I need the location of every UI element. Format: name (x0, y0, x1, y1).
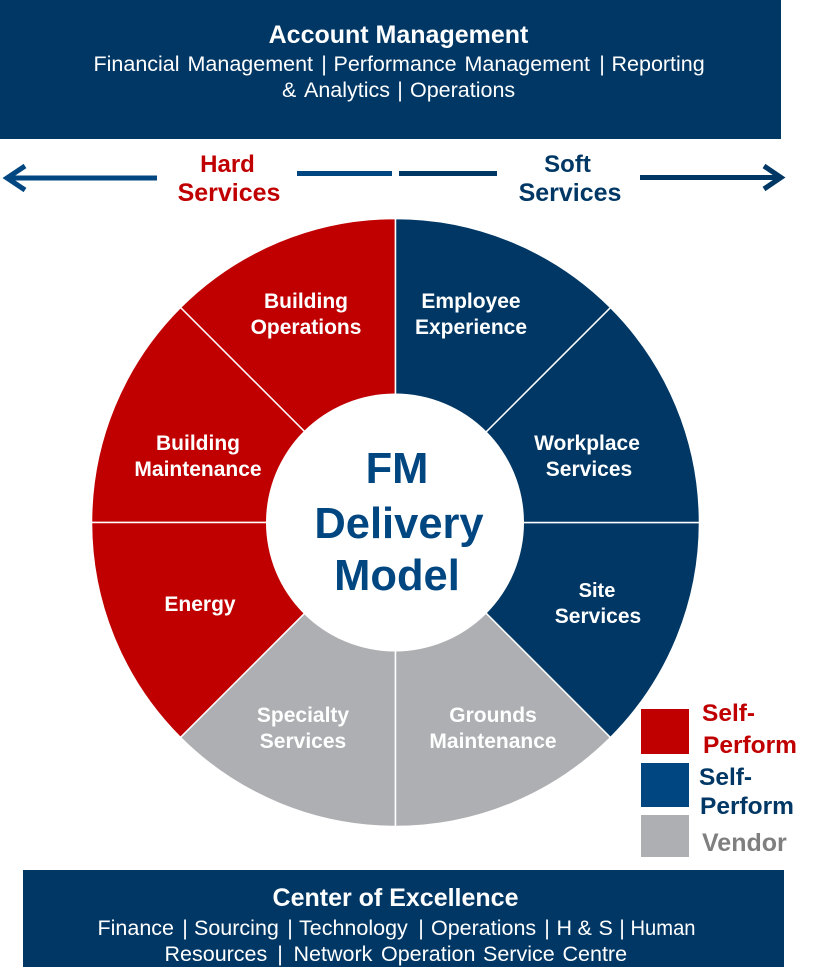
heading: center of excellence: Center of Excellence (273, 884, 519, 912)
heading: FM delivery model (314, 445, 484, 600)
text: account management items: Operations (410, 78, 515, 102)
arrow: hard services left (7, 166, 157, 190)
segment: building operations (180, 218, 396, 522)
label: building operations: Operations (251, 316, 361, 339)
heading: FM delivery model: FM (366, 445, 428, 493)
heading: soft services (519, 151, 621, 207)
text: center of excellence items: | (544, 916, 550, 940)
text: account management items: Performance (334, 52, 457, 76)
text: center of excellence items: | (277, 942, 283, 966)
text: center of excellence items: | (619, 916, 625, 940)
text: center of excellence items: S (598, 916, 613, 940)
text: center of excellence items: Finance (98, 916, 174, 940)
arrow: soft services right (640, 166, 781, 189)
text: center of excellence items: Operations (431, 916, 536, 940)
text: center of excellence items: Technology (299, 916, 408, 940)
segment: specialty services (180, 522, 396, 826)
label: building maintenance: Building (156, 432, 240, 455)
legend swatch: blue (641, 763, 689, 807)
label: workplace services: Services (546, 458, 632, 481)
text: center of excellence items: Human (630, 916, 696, 940)
text: account management items: Management (464, 52, 590, 76)
panel: account management (0, 0, 781, 139)
label: site services: Services (555, 605, 641, 628)
legend swatch: red (641, 709, 689, 754)
text: center of excellence items (98, 916, 696, 966)
text: center of excellence items: Sourcing (194, 916, 279, 940)
legend label: soft self-perform: Self- (699, 764, 752, 791)
text: center of excellence items: | (418, 916, 424, 940)
text: account management items: | (397, 78, 403, 102)
chart: FM delivery wheel (91, 218, 699, 826)
segment labels (134, 290, 641, 753)
label: energy: Energy (164, 593, 236, 616)
panel: center of excellence (23, 870, 784, 967)
heading: FM delivery model: Model (334, 552, 460, 600)
text: account management items: & (282, 78, 296, 102)
label: employee experience: Employee (421, 290, 521, 313)
segment: building maintenance (91, 308, 395, 522)
label: specialty services: Specialty (257, 704, 349, 727)
text: account management items: Analytics (304, 78, 390, 102)
text: account management items: | (321, 52, 327, 76)
legend (641, 700, 797, 857)
text: account management items: Reporting (612, 52, 705, 76)
label: building operations: Building (264, 290, 348, 313)
heading: soft services: Soft (544, 151, 591, 178)
text: account management items (94, 52, 705, 102)
text: center of excellence items: Operation (381, 942, 475, 966)
center circle (266, 394, 524, 652)
label: grounds maintenance: Maintenance (429, 730, 557, 753)
text: center of excellence items: H (556, 916, 572, 940)
divider bar: hard side (297, 171, 392, 176)
heading: hard services: Hard (200, 151, 255, 178)
text: account management items: Management (188, 52, 313, 76)
segment: site services (396, 522, 700, 738)
legend label: vendor: Vendor (702, 829, 787, 857)
segment: employee experience (396, 218, 610, 522)
text: center of excellence items: | (287, 916, 293, 940)
label: site services: Site (579, 580, 615, 602)
text: center of excellence items: | (182, 916, 188, 940)
heading: FM delivery model: Delivery (314, 500, 484, 548)
heading: account management: Account Management (269, 21, 529, 49)
text: account management items: | (599, 52, 605, 76)
text: center of excellence items: Resources (164, 942, 267, 966)
label: workplace services: Workplace (534, 432, 640, 455)
text: center of excellence items: Service (483, 942, 555, 966)
text: account management items: Financial (94, 52, 180, 76)
legend label: soft self-perform: Perform (700, 793, 794, 820)
text: center of excellence items: Centre (562, 942, 627, 966)
legend label: hard self-perform: Self- (702, 700, 755, 727)
divider bar: soft side (399, 171, 497, 176)
legend swatch: grey (641, 815, 689, 857)
segment: workplace services (396, 308, 700, 522)
segment: grounds maintenance (396, 522, 610, 826)
text: center of excellence items: & (578, 916, 592, 940)
label: specialty services: Services (260, 730, 346, 753)
label: grounds maintenance: Grounds (449, 704, 537, 727)
legend label: hard self-perform: Perform (703, 732, 797, 759)
heading: hard services (178, 151, 280, 207)
label: employee experience: Experience (415, 316, 527, 339)
text: center of excellence items: Network (294, 942, 373, 966)
segment: energy (91, 522, 395, 738)
heading: soft services: Services (519, 179, 621, 207)
label: building maintenance: Maintenance (134, 458, 262, 481)
heading: hard services: Services (178, 179, 280, 207)
